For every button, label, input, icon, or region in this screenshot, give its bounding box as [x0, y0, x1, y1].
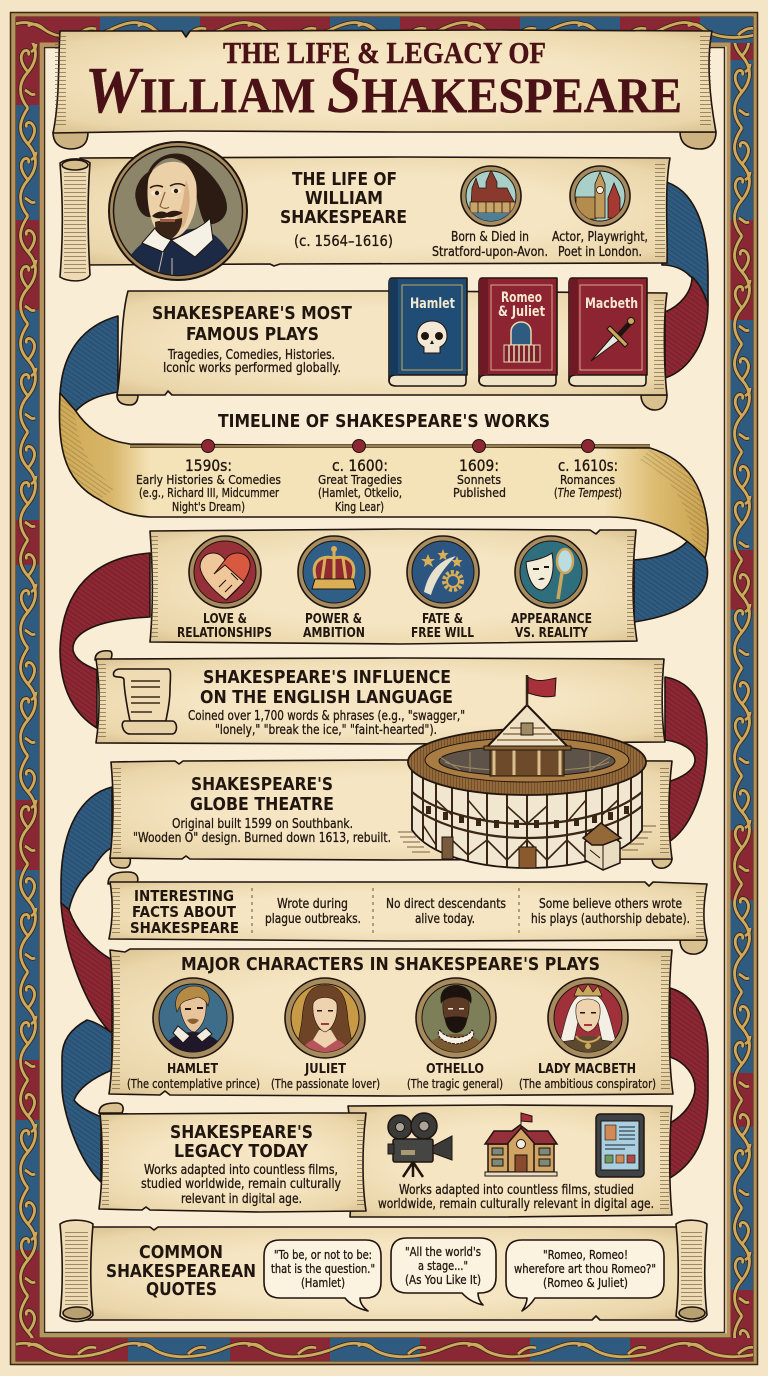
- globe heading: SHAKESPEARE'S: [191, 774, 333, 795]
- influence description: Coined over 1,700 words & phrases (e.g., "swagger,": [188, 709, 465, 724]
- book: Romeo and Juliet: & Juliet: [498, 304, 545, 320]
- ribbon: blue top right: [662, 181, 708, 305]
- skull: [417, 321, 447, 353]
- dagger: [591, 318, 634, 361]
- icon: appearance: [515, 536, 587, 608]
- timeline: 1590s: Night's Dream): [172, 499, 245, 514]
- quote bubble: As You Like It: [391, 1238, 496, 1305]
- fact: authorship: [531, 897, 690, 927]
- legacy description: relevant in digital age.: [181, 1192, 302, 1207]
- life heading: WILLIAM: [305, 188, 383, 209]
- caption: actor: Actor, Playwright,: [552, 230, 648, 245]
- legacy caption: worldwide, remain culturally relevant in digital age.: [378, 1197, 654, 1212]
- title line 1: THE LIFE & LEGACY OF: [223, 35, 546, 70]
- caption: born and died: Stratford-upon-Avon.: [432, 245, 548, 260]
- label: power: POWER &: [305, 612, 362, 627]
- panel: timeline ribbon: [59, 393, 708, 558]
- book: Macbeth: Macbeth: [585, 296, 638, 312]
- label: Lady Macbeth: LADY MACBETH: [538, 1062, 636, 1077]
- fact: descendants: alive today.: [415, 912, 475, 927]
- timeline: 1590s: (e.g., Richard III, Midcummer: [139, 485, 280, 500]
- timeline: 1590s: 1590s:: [185, 456, 232, 475]
- quote bubble: Romeo and Juliet: [506, 1240, 664, 1311]
- caption: actor: [552, 230, 648, 260]
- timeline: c. 1610s: c. 1610s:: [558, 456, 618, 475]
- quote bubble: As You Like It: "All the world's: [405, 1244, 481, 1259]
- portrait: Othello: [416, 978, 496, 1058]
- facts heading: FACTS ABOUT: [132, 903, 237, 921]
- fact: authorship: Some believe others wrote: [539, 897, 682, 912]
- icon: school: [485, 1113, 557, 1176]
- timeline: c. 1600: c. 1600:: [332, 456, 388, 475]
- panel: Globe Theatre: [110, 760, 672, 868]
- timeline: 1609: Sonnets: [457, 472, 501, 487]
- ribbon: red right of characters: [670, 988, 708, 1178]
- facts heading: INTERESTING: [134, 887, 234, 905]
- quote bubble: Romeo and Juliet: "Romeo, Romeo!: [543, 1247, 628, 1262]
- quotes heading: SHAKESPEAREAN: [106, 1261, 256, 1282]
- fact: plague: plague outbreaks.: [265, 912, 361, 927]
- label: Juliet: (The passionate lover): [271, 1076, 380, 1091]
- quote bubble: Romeo and Juliet: wherefore art thou Romeo?": [514, 1261, 656, 1276]
- panel: the life of William Shakespeare: [60, 142, 670, 285]
- label: fate: FATE &: [422, 612, 463, 627]
- timeline: c. 1600: Great Tragedies: [318, 472, 402, 487]
- plays heading: SHAKESPEARE'S MOST: [152, 303, 353, 324]
- ribbon: red left of themes: [60, 553, 150, 728]
- plays description: Iconic works performed globally.: [163, 361, 341, 376]
- life heading: (c. 1564–1616): [294, 232, 393, 250]
- icon: film camera: [388, 1113, 452, 1177]
- panel: themes: [150, 529, 637, 644]
- timeline: 1590s: Early Histories & Comedies: [136, 472, 281, 487]
- timeline: c. 1610s: (The Tempest): [554, 485, 622, 500]
- life heading: [280, 169, 407, 250]
- influence description: "lonely," "break the ice," "faint-hearted").: [215, 723, 437, 738]
- label: love: RELATIONSHIPS: [177, 626, 272, 641]
- legacy heading: LEGACY TODAY: [174, 1141, 309, 1162]
- portrait: Hamlet: [153, 978, 233, 1058]
- quotes heading: [106, 1242, 256, 1300]
- influence heading: SHAKESPEARE'S INFLUENCE: [203, 667, 451, 688]
- ribbon: blue left of globe: [61, 787, 112, 910]
- label: Juliet: [271, 1062, 380, 1091]
- fact: plague: Wrote during: [277, 897, 348, 912]
- ribbon: blue left of legacy: [62, 1020, 112, 1182]
- doors: [442, 823, 621, 870]
- plays heading: [152, 303, 353, 345]
- balcony: [504, 322, 540, 362]
- globe heading: [190, 774, 334, 815]
- life heading: SHAKESPEARE: [280, 207, 407, 228]
- legacy caption: [378, 1183, 654, 1212]
- label: Lady Macbeth: (The ambitious conspirator): [519, 1076, 656, 1091]
- icon: parchment: [113, 669, 176, 734]
- ribbon: red top right: [665, 277, 708, 378]
- label: fate: [411, 612, 474, 641]
- title line 2: WILLIAM SHAKESPEARE: [85, 54, 682, 127]
- panel: legacy icons: [348, 1105, 672, 1217]
- icon: fate: [407, 536, 479, 608]
- portrait: [109, 142, 247, 285]
- facts heading: [130, 887, 239, 937]
- legacy description: Works adapted into countless films,: [144, 1163, 338, 1178]
- scroll roll: [60, 159, 90, 281]
- label: fate: FREE WILL: [411, 626, 474, 641]
- globe heading: GLOBE THEATRE: [190, 794, 334, 815]
- globe description: Original built 1599 on Southbank.: [172, 817, 353, 832]
- icon: crown: [298, 536, 370, 608]
- label: Hamlet: [127, 1062, 260, 1091]
- timeline: c. 1600: King Lear): [335, 499, 384, 514]
- quote bubble: Romeo and Juliet: (Romeo & Juliet): [543, 1275, 628, 1290]
- quote bubble: Hamlet: [264, 1240, 381, 1311]
- ribbon: red left of facts: [61, 903, 112, 1034]
- fact: authorship: his plays (authorship debate).: [531, 912, 690, 927]
- plays description: [163, 348, 341, 376]
- timeline axis: [130, 440, 650, 452]
- legacy heading: [170, 1122, 313, 1162]
- portrait: Lady Macbeth: [548, 978, 628, 1058]
- quote bubble: Hamlet: (Hamlet): [301, 1275, 345, 1290]
- caption: actor: Poet in London.: [558, 245, 642, 260]
- label: Othello: [407, 1062, 503, 1091]
- title banner: [53, 30, 716, 149]
- influence heading: ON THE ENGLISH LANGUAGE: [200, 687, 453, 708]
- panel: interesting facts: [108, 872, 707, 954]
- label: love: [177, 612, 272, 641]
- panel: legacy today: [99, 1103, 366, 1212]
- stage house: [484, 675, 571, 776]
- quote bubble: As You Like It: (As You Like It): [405, 1272, 481, 1287]
- book: Romeo and Juliet: [479, 278, 557, 386]
- panel: major characters: [109, 949, 673, 1096]
- life heading: THE LIFE OF: [292, 169, 397, 190]
- book: Macbeth: [569, 278, 647, 386]
- fact: descendants: [386, 897, 506, 927]
- timeline: c. 1610s: Romances: [560, 472, 615, 487]
- label: appearance: APPEARANCE: [511, 612, 592, 627]
- timeline: c. 1600: (Hamlet, Otkelio,: [318, 485, 402, 500]
- illustration: Globe Theatre building: [398, 675, 656, 870]
- ribbon: blue right of themes: [634, 538, 707, 622]
- quotes heading: COMMON: [139, 1242, 223, 1263]
- fact: descendants: No direct descendants: [386, 897, 506, 912]
- panel: most famous plays: [117, 278, 667, 410]
- left scroll roll: [60, 1220, 93, 1322]
- icon: love: [189, 536, 261, 608]
- caption: born and died: [432, 230, 548, 260]
- book: Romeo and Juliet: Romeo: [501, 290, 542, 306]
- quote bubble: As You Like It: a stage...": [418, 1258, 468, 1273]
- legacy description: studied worldwide, remain culturally: [141, 1177, 341, 1192]
- ribbon: blue left of plays: [60, 316, 118, 412]
- plays heading: FAMOUS PLAYS: [186, 324, 319, 345]
- icon: tablet: [596, 1114, 644, 1177]
- book: Hamlet: [389, 278, 467, 386]
- panel: common quotes: [60, 1220, 707, 1322]
- legacy caption: Works adapted into countless films, studied: [399, 1183, 634, 1198]
- label: power: [303, 612, 365, 641]
- book: Hamlet: Hamlet: [410, 296, 455, 312]
- globe description: "Wooden O" design. Burned down 1613, rebuilt.: [133, 831, 391, 846]
- right scroll roll: [676, 1220, 707, 1322]
- icon: London: [570, 166, 630, 226]
- icon: Stratford-upon-Avon: [461, 166, 521, 226]
- timeline: 1590s: [136, 456, 281, 514]
- influence heading: [200, 667, 453, 708]
- characters heading: MAJOR CHARACTERS IN SHAKESPEARE'S PLAYS: [181, 954, 600, 975]
- timeline: c. 1600: [318, 456, 402, 514]
- label: Hamlet: (The contemplative prince): [127, 1076, 260, 1091]
- label: Othello: OTHELLO: [426, 1062, 484, 1077]
- portrait: Juliet: [285, 978, 365, 1058]
- ribbon: red right of influence: [665, 677, 707, 843]
- legacy heading: SHAKESPEARE'S: [170, 1122, 313, 1143]
- panel: influence on the English language: [95, 651, 665, 744]
- label: Juliet: JULIET: [304, 1062, 346, 1077]
- quotes heading: QUOTES: [146, 1279, 217, 1300]
- timeline heading: TIMELINE OF SHAKESPEARE'S WORKS: [218, 411, 550, 432]
- label: Lady Macbeth: [519, 1062, 656, 1091]
- fact: plague: [265, 897, 361, 927]
- caption: born and died: Born & Died in: [451, 230, 529, 245]
- label: appearance: [511, 612, 592, 641]
- quote bubble: Hamlet: "To be, or not to be:: [274, 1247, 372, 1262]
- legacy description: [141, 1163, 341, 1207]
- facts heading: SHAKESPEARE: [130, 919, 239, 937]
- globe description: [133, 817, 391, 846]
- timeline: 1609: [453, 456, 506, 500]
- quote bubble: Hamlet: that is the question.": [271, 1261, 375, 1276]
- timeline: c. 1610s: [554, 456, 622, 500]
- plays description: Tragedies, Comedies, Histories.: [167, 348, 335, 363]
- label: power: AMBITION: [303, 626, 365, 641]
- label: Hamlet: HAMLET: [167, 1062, 218, 1077]
- influence description: [188, 709, 465, 738]
- timeline: 1609: Published: [453, 485, 506, 500]
- label: appearance: VS. REALITY: [515, 626, 588, 641]
- timeline: 1609: 1609:: [459, 456, 499, 475]
- label: love: LOVE &: [203, 612, 247, 627]
- roof: [408, 729, 646, 795]
- label: Othello: (The tragic general): [407, 1076, 503, 1091]
